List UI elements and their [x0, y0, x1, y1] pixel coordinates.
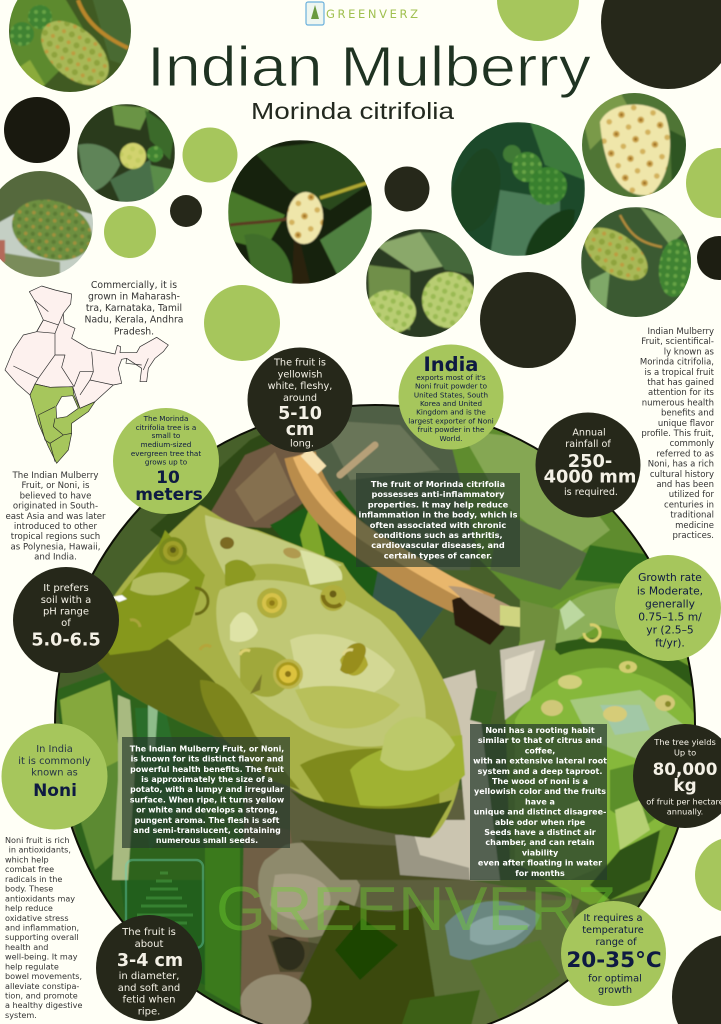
text: overview: cultural history	[650, 470, 714, 480]
text box: fruit description: The Indian Mulberry Fruit, or Noni,	[130, 744, 284, 754]
callout: tree height 10 meters: The Morinda	[143, 414, 188, 423]
text: origin: east Asia and was later	[5, 512, 106, 522]
callout: commonly known as Noni: it is commonly	[18, 756, 91, 767]
text: commercial regions: Pradesh.	[114, 326, 154, 338]
photo: green fruitlets and dark leaves	[451, 122, 585, 256]
callout: fruit size 5-10 cm: 5-10	[278, 404, 322, 424]
callout: tree height 10 meters: 10	[156, 468, 180, 488]
text: overview: Indian Mulberry	[647, 327, 714, 337]
text box: rooting habit: yellowish color and the fruits	[474, 787, 606, 796]
logo	[306, 2, 418, 25]
callout: yield: 80,000	[653, 759, 717, 779]
callout: annual rainfall: is required.	[564, 487, 618, 498]
callout: growth rate: ft/yr).	[655, 637, 685, 650]
text: origin: tropical regions such	[11, 532, 100, 542]
callout: temperature: for optimal	[588, 974, 642, 984]
callout: temperature: It requires a	[584, 913, 642, 924]
callout: fruit size 5-10 cm	[248, 348, 352, 452]
photo: white noni fruit close-up	[581, 92, 690, 198]
text: overview: medicine	[675, 521, 714, 531]
text box: rooting habit: unique and distinct disagree-	[474, 808, 606, 817]
callout: yield: The tree yields	[653, 737, 716, 747]
text: antioxidants: supporting overall	[5, 932, 79, 942]
photo: noni fruit with branch, top left	[9, 0, 131, 92]
text: antioxidants: body. These	[5, 884, 53, 894]
text: antioxidants: tion, and promote	[5, 990, 78, 1000]
callout: annual rainfall: Annual	[572, 428, 606, 438]
lower-left leaves	[55, 660, 245, 1024]
text box: fruit description: pungent aroma. The flesh is soft	[135, 816, 280, 825]
text: overview: unique flavor	[658, 419, 715, 429]
callout: temperature: range of	[595, 937, 637, 948]
callout: soil pH	[13, 567, 119, 673]
text: antioxidants: oxidative stress	[5, 913, 69, 923]
text box: anti-inflammatory: possesses anti-inflammatory	[371, 489, 505, 499]
text box: anti-inflammatory: often associated with chronic	[370, 520, 506, 530]
callout: temperature	[561, 901, 666, 1006]
watermark logo: GREENVERZ	[216, 875, 616, 944]
photo: large green noni fruit	[0, 171, 93, 277]
text: commercial regions: grown in Maharash-	[88, 292, 180, 302]
text box: fruit description: powerful health benefits. The fruit	[130, 765, 284, 774]
text box: rooting habit: for months	[515, 869, 565, 878]
photo: pale fruit on central branch	[228, 140, 375, 284]
text: origin: The Indian Mulberry	[12, 471, 98, 481]
text: overview: profile. This fruit,	[641, 429, 714, 439]
text box: anti-inflammatory: certain types of cancer.	[384, 550, 492, 560]
callout: growth rate: is Moderate,	[637, 584, 703, 597]
text box: fruit description	[122, 737, 290, 848]
callout: India exports: fruit powder in the	[418, 425, 485, 434]
main fruit	[96, 505, 462, 838]
text: overview: is a tropical fruit	[644, 368, 715, 378]
text: overview: Noni, has a rich	[648, 460, 714, 470]
callout: fruit size 5-10 cm: cm	[286, 420, 314, 440]
logo: GREENVERZ	[326, 7, 418, 21]
callout: India exports: exports most of it's	[416, 373, 486, 382]
callout: fruit diameter: The fruit is	[121, 927, 176, 938]
text box: anti-inflammatory	[356, 473, 520, 567]
text: overview: practices.	[672, 531, 714, 541]
text box: anti-inflammatory: conditions such as arthritis,	[373, 530, 503, 540]
callout: commonly known as Noni	[2, 724, 108, 830]
callout: soil pH: of	[61, 618, 71, 629]
text: overview: numerous health	[642, 398, 714, 408]
callout: fruit diameter	[96, 915, 202, 1021]
text: overview: commonly	[670, 439, 714, 449]
text box: fruit description: potato, with a lumpy and irregular	[130, 785, 284, 794]
lower scene	[290, 788, 580, 1024]
callout: tree height 10 meters	[113, 408, 219, 514]
text: origin: originated in South-	[13, 502, 98, 512]
callout: tree height 10 meters: evergreen tree that	[131, 449, 201, 458]
text box: anti-inflammatory: The fruit of Morinda citrifolia	[371, 479, 505, 489]
callout: India exports: Korea and United	[420, 399, 482, 408]
photo: fruit among leaves	[77, 104, 175, 202]
callout: growth rate	[615, 555, 721, 661]
callout: annual rainfall: 4000 mm	[544, 466, 636, 488]
text box: rooting habit: Noni has a rooting habit	[485, 726, 595, 735]
callout: fruit size 5-10 cm: long.	[290, 438, 314, 450]
text: antioxidants: well-being. It may	[5, 952, 78, 962]
callout: temperature: 20-35°C	[566, 948, 662, 973]
callout: fruit diameter: and soft and	[118, 983, 180, 994]
text box: rooting habit: chamber, and can retain	[485, 838, 595, 847]
callout: commonly known as Noni: known as	[31, 768, 78, 778]
callout: growth rate: generally	[645, 597, 695, 610]
text box: rooting habit: The wood of noni is a	[492, 777, 588, 786]
central painted fruit illustration	[50, 400, 710, 1024]
photo: twin pale green fruits	[364, 229, 476, 339]
map of India	[5, 286, 168, 463]
text: antioxidants: combat free	[5, 864, 54, 874]
callout: yield: kg	[673, 775, 697, 795]
callout: yield	[633, 724, 721, 828]
callout: growth rate: yr (2.5–5	[646, 623, 694, 636]
callout: fruit diameter: 3-4 cm	[117, 951, 183, 971]
callout: India exports: Noni fruit powder to	[415, 382, 487, 391]
text box: anti-inflammatory: inflammation in the body, which is	[359, 510, 518, 520]
text: origin: introduced to other	[14, 522, 98, 532]
text: overview: referred to as	[656, 449, 715, 459]
text: antioxidants: and inflammation,	[5, 922, 79, 932]
callout: India exports: India	[424, 353, 478, 376]
text: commercial regions: tra, Karnataka, Tamil	[86, 303, 182, 314]
text: antioxidants: a healthy digestive	[5, 1000, 82, 1010]
callout: soil pH: 5.0-6.5	[31, 630, 101, 650]
text box: fruit description: or white and develops a strong,	[136, 806, 278, 815]
text box: rooting habit: able odor when ripe	[495, 818, 586, 827]
text: origin: as Polynesia, Hawaii,	[11, 542, 100, 552]
callout: yield: Up to	[674, 748, 696, 758]
text: origin: Fruit, or Noni, is	[22, 481, 90, 491]
callout: soil pH: It prefers	[43, 583, 89, 594]
text box: rooting habit: system and a deep taproot.	[478, 767, 602, 776]
text: origin: believed to have	[20, 491, 91, 501]
callout: fruit size 5-10 cm: white, fleshy,	[268, 381, 332, 392]
callout: fruit diameter: about	[135, 939, 164, 950]
callout: India exports: United States, South	[414, 390, 488, 399]
text box: rooting habit: even after floating in water	[478, 859, 602, 868]
text box: anti-inflammatory: cardiovascular diseases, and	[371, 540, 505, 550]
photo: two green noni fruits	[575, 207, 693, 320]
text: overview: traditional	[670, 511, 714, 521]
text: antioxidants: which help	[5, 854, 49, 864]
text: overview: attention for its	[648, 388, 715, 398]
callout: growth rate: 0.75–1.5 m/	[638, 610, 702, 623]
callout: soil pH: soil with a	[41, 595, 91, 606]
callout: tree height 10 meters: medium-sized	[141, 440, 191, 449]
text box: rooting habit: with an extensive lateral root	[473, 757, 607, 766]
text box: fruit description: is approximately the size of a	[141, 775, 273, 784]
callout: tree height 10 meters: citrifolia tree is a	[136, 423, 196, 432]
text: antioxidants: bowel movements,	[5, 971, 82, 981]
subtitle: Morinda citrifolia	[251, 98, 454, 124]
text box: rooting habit: similar to that of citrus and	[478, 736, 602, 745]
text: antioxidants: help regulate	[5, 961, 59, 971]
text: overview: Fruit, scientifical-	[641, 337, 714, 347]
text: commercial regions: Nadu, Kerala, Andhra	[85, 314, 183, 326]
callout: commonly known as Noni: In India	[36, 744, 73, 755]
callout: soil pH: pH range	[43, 606, 89, 618]
text: antioxidants: health and	[5, 942, 48, 952]
text: origin: and India.	[34, 553, 77, 563]
right fruit	[505, 584, 710, 905]
text box: rooting habit: have a	[525, 797, 555, 806]
text: overview: and has been	[656, 480, 714, 490]
text: overview: centuries in	[664, 500, 714, 510]
callout: fruit diameter: in diameter,	[119, 971, 179, 982]
callout: annual rainfall: 250-	[568, 451, 612, 472]
text box: rooting habit: coffee,	[525, 746, 555, 755]
text box: fruit description: and semi-translucent, containing	[133, 826, 281, 835]
text: antioxidants: help reduce	[5, 903, 53, 913]
callout: tree height 10 meters: meters	[135, 485, 203, 505]
callout: fruit size 5-10 cm: The fruit is	[273, 358, 326, 368]
callout: tree height 10 meters: small to	[152, 431, 180, 440]
callout: fruit size 5-10 cm: around	[283, 393, 317, 404]
callout: commonly known as Noni: Noni	[33, 781, 77, 801]
callout: growth rate: Growth rate	[638, 571, 702, 584]
text: antioxidants: system.	[5, 1010, 37, 1020]
callout: annual rainfall	[536, 412, 640, 518]
callout: annual rainfall: rainfall of	[565, 439, 611, 450]
text: overview: that has gained	[647, 378, 714, 388]
text box: rooting habit	[470, 724, 607, 880]
callout: temperature: temperature	[582, 925, 644, 936]
text: commercial regions: Commercially, it is	[91, 280, 177, 291]
text box: rooting habit: Seeds have a distinct air	[484, 828, 596, 837]
text box: anti-inflammatory: properties. It may help reduce	[368, 499, 509, 509]
text box: fruit description: surface. When ripe, it turns yellow	[130, 795, 285, 804]
callout: fruit size 5-10 cm: yellowish	[278, 370, 322, 380]
text: antioxidants: Noni fruit is rich	[5, 835, 69, 845]
callout: temperature: growth	[598, 985, 632, 996]
callout: India exports: Kingdom and is the	[416, 408, 486, 417]
text: overview: benefits and	[661, 409, 714, 419]
callout: India exports: World.	[440, 434, 462, 443]
text box: fruit description: numerous small seeds.	[156, 836, 258, 845]
callout: tree height 10 meters: grows up to	[145, 458, 187, 466]
text: antioxidants: in antioxidants,	[6, 845, 71, 855]
callout: yield: annually.	[667, 806, 703, 816]
text: overview: utilized for	[669, 490, 715, 500]
text: antioxidants: antioxidants may	[5, 893, 75, 903]
text: antioxidants: radicals in the	[5, 874, 62, 884]
callout: fruit diameter: fetid when	[123, 994, 175, 1006]
watermark logo	[126, 860, 616, 948]
title: Indian Mulberry	[147, 35, 592, 99]
callout: India exports	[398, 344, 504, 450]
callout: fruit diameter: ripe.	[138, 1006, 160, 1018]
text: overview: Morinda citrifolia,	[640, 358, 714, 368]
text: antioxidants: alleviate constipa-	[5, 981, 79, 991]
text box: rooting habit: viability	[522, 848, 559, 857]
text box: fruit description: is known for its distinct flavor and	[131, 755, 283, 764]
text: overview: ly known as	[664, 347, 715, 357]
callout: India exports: largest exporter of Noni	[408, 416, 494, 425]
